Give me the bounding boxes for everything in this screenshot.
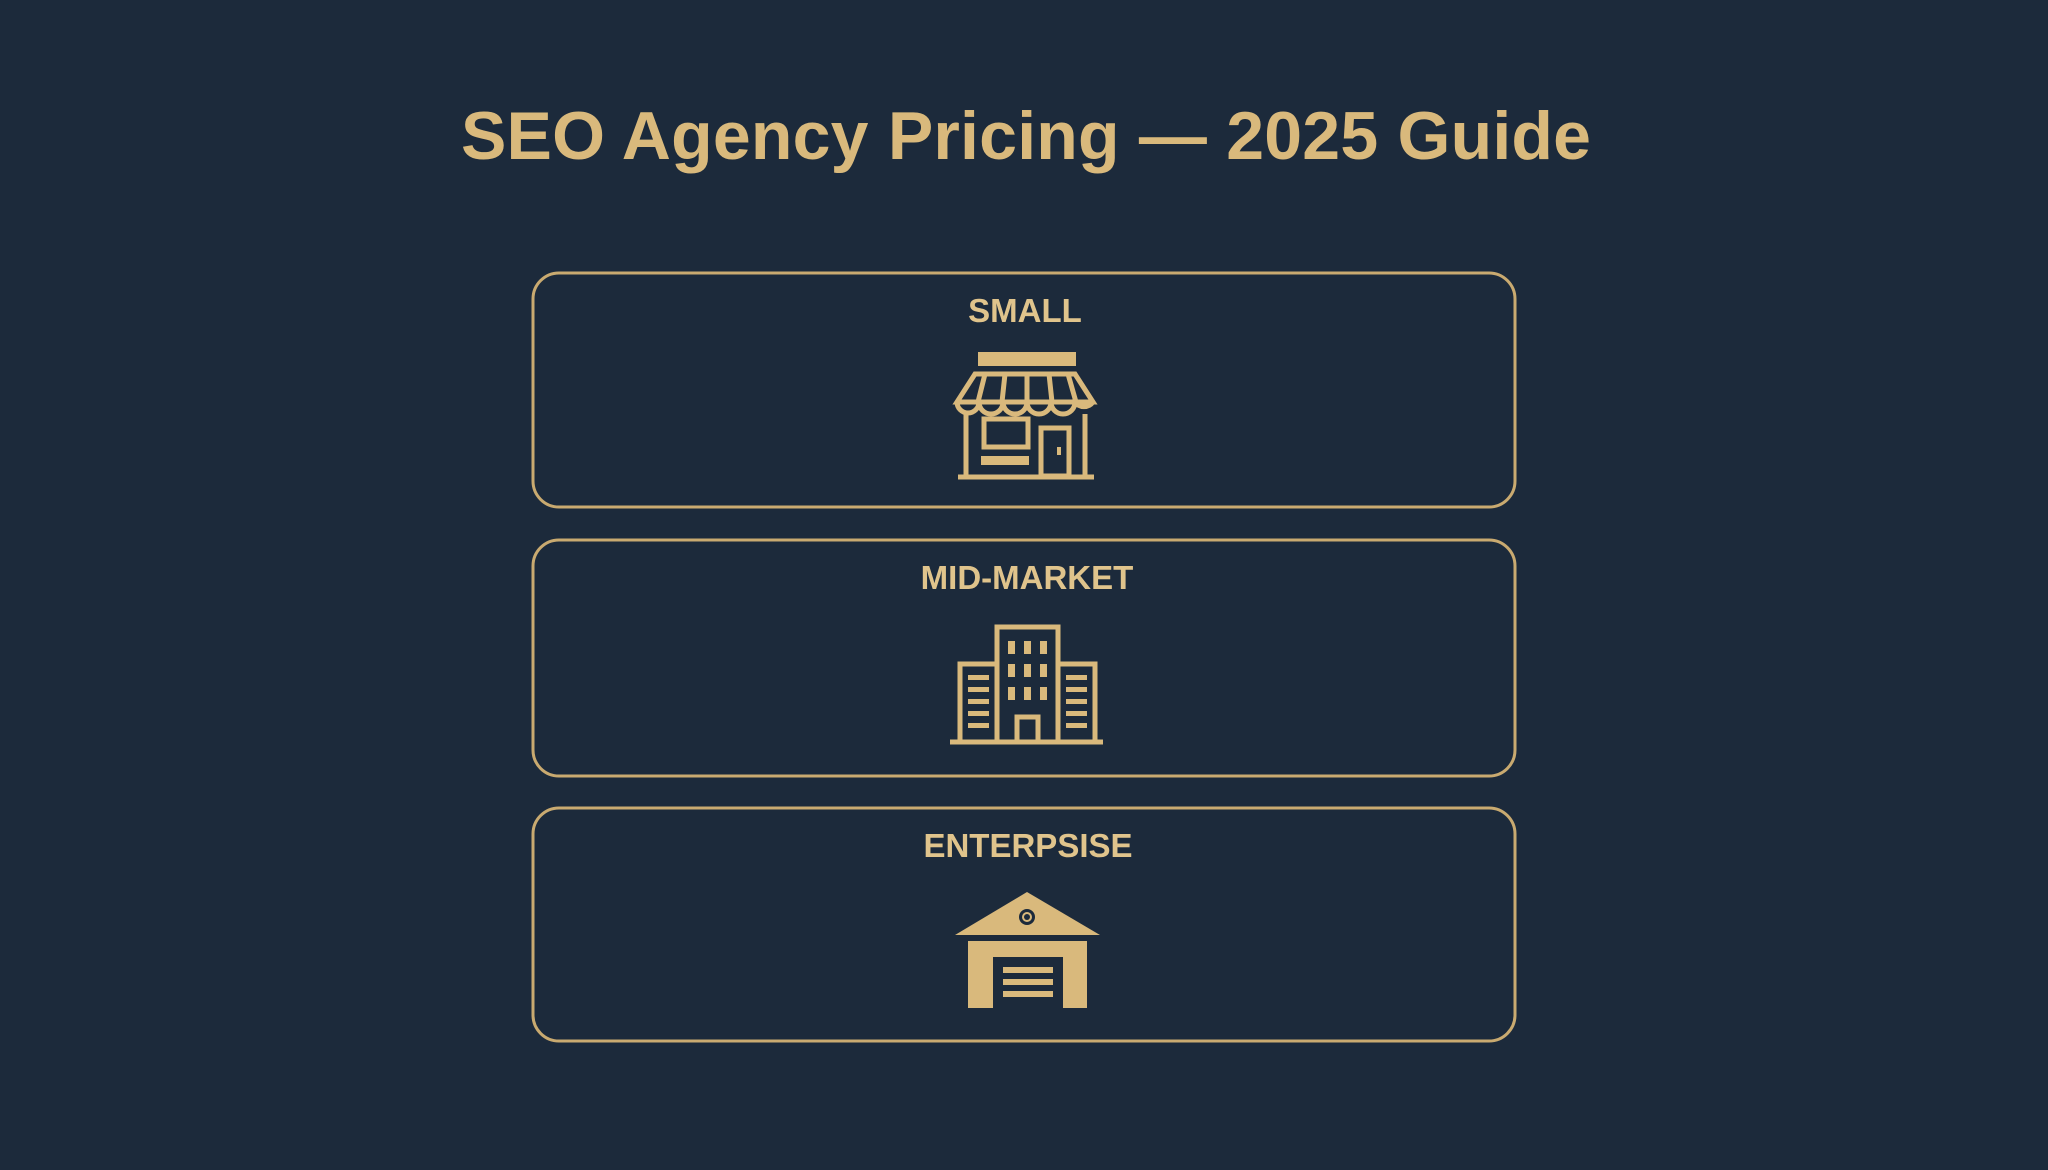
panel: small <box>533 273 1515 507</box>
icon: warehouse <box>955 892 1100 1008</box>
label: mid-market: MID-MARKET <box>921 559 1133 596</box>
icon: storefront <box>957 352 1094 477</box>
panel: mid-market <box>533 540 1515 776</box>
icon: office building <box>950 627 1103 742</box>
panel: enterprise <box>533 808 1515 1041</box>
title: SEO Agency Pricing — 2025 Guide <box>461 98 1591 174</box>
label: small: SMALL <box>968 292 1082 329</box>
label: enterprise: ENTERPSISE <box>923 827 1133 864</box>
